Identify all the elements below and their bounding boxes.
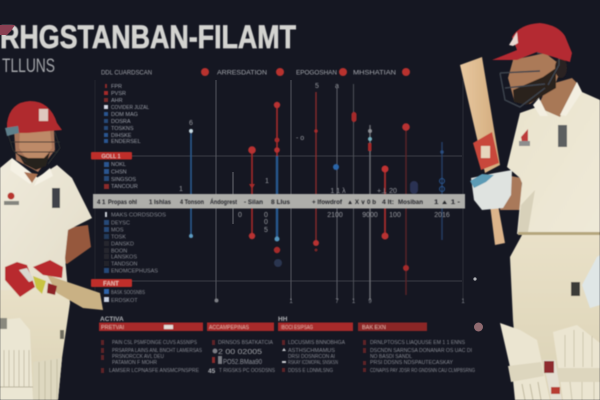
axis tick labels [214,298,465,305]
grey summary band: 1 ▲ 1 - [434,200,460,206]
chart series: stems and markers: 1 1 λ [330,188,346,195]
chart series: stems and markers [179,83,444,300]
right trousers [510,235,600,400]
right helmet [492,23,572,62]
left bat [47,275,103,310]
right shirt [507,82,600,234]
list: lower legend rows [104,212,166,274]
panel: fourth column: NO BASDI SANDL [370,354,412,360]
panel: second column: 2 00 02005 [218,347,262,356]
list: lower legend rows: LANSKOS [111,254,137,260]
decorative dots at right edge of chart [473,277,483,332]
list: upper legend rows: FPR [111,84,122,90]
bottom panels [99,316,475,375]
panel: Activa: PATAMON F MOHR [112,360,157,366]
value labels below band: 2100 [327,212,343,219]
value labels below band: 0 [264,219,268,226]
list: lower legend rows: ENOMCEPHUSAS [111,268,158,274]
list: lower legend rows: DEYSC [111,220,130,226]
list: upper legend rows: COVIDER JUZAL [111,105,149,111]
left pads [0,318,64,400]
list: final legend rows: ERDSKOT [111,298,138,304]
panel: second column: PO52.BMaa90 [223,359,262,366]
list: lower legend rows: BOON [111,248,127,254]
right bat [460,57,505,245]
list: lower legend rows: TANDSON [111,262,138,268]
chart legend: MHSHATIAN [353,70,396,76]
panel: Activa: ACTIVA [100,316,124,323]
list: lower legend rows: DANSKD [111,242,134,248]
list: final legend rows [104,289,145,304]
panel: fourth column: DRNLPTOSCS LIAQUUSE EM 1 1 ENNS [370,340,465,346]
panel: second column: T RIGSKS PC OOSDSNS [219,368,275,374]
panel: fourth column: BAK EXN [362,325,386,331]
right shirt badges [519,125,567,147]
chart series: stems and markers: 5 [315,83,319,90]
panel: fourth column: PRSI DDSNS NDSPAUTECASKAY [370,360,453,366]
axis tick labels: 1 [461,299,465,305]
list: upper legend rows: PVSR [111,91,126,97]
grey summary band: + Ifowdrof [312,200,343,206]
right neck and face [537,78,578,118]
category bar: FANT: FANT [103,282,119,288]
list: middle legend rows: TANCOUR [111,184,138,190]
left arm [60,225,91,264]
player: left batsman [0,101,103,400]
right second glove [582,255,600,308]
axis tick labels: 7 [335,299,339,305]
list: upper legend rows [104,84,149,145]
panel: third column: DDSS E LDNMLSNG [288,368,333,374]
list: upper legend rows: AHR [111,98,123,104]
list: upper legend rows: DIHSKE [111,133,132,139]
panel: third column: RSKAY ICDMOPAL SNSKSN [288,360,338,366]
right waistband [518,232,600,235]
list: upper legend rows: TOSKNS [111,126,134,132]
panel: Activa: PRETVAI [101,325,125,331]
panel: third column [278,316,353,374]
grey summary band [93,194,465,208]
value labels below band [238,212,450,234]
axis tick labels: 1 [289,299,293,305]
value labels below band: 100 [389,212,401,219]
icon: title flag mark [0,25,15,35]
list: middle legend rows: CHSN [111,170,127,176]
panel: fourth column: CDNAPIS PAY JDSR RO GNDSNN CAU CLMPBSRNG [370,368,475,374]
grey summary band: 4 lt: [382,200,394,206]
panel: Activa: PRSARPA LAINS ANL BNCHT LAMERSAS [112,348,202,354]
list: lower legend rows: MAKS CORDSDSOS [111,212,166,218]
value labels below band: 0 [238,212,242,219]
panel: Activa [99,316,203,374]
panel: Activa: PAIN CSL PSMFDINGE CUVS ASSNIPS [112,340,197,346]
chart legend: ARRESDATION [217,70,267,76]
chart series: stems and markers: a [335,83,339,90]
panel: third column: HH [278,316,288,323]
panel: third column: IBOCI ESIPSAG [281,325,313,331]
panel: second column: DRNSOS BSATKATCIA [218,340,273,346]
list: upper legend rows: DOSRA [111,119,131,125]
left shirt badges [4,188,60,208]
list: lower legend rows: TOSK [111,234,126,240]
chart series: stems and markers: +⊥ 20 [377,188,397,195]
grey summary band: 1 Ishlas [149,200,172,206]
chart legend: EPOGOSHAN [296,70,337,76]
list: lower legend rows: MOS [111,228,124,234]
chart series: stems and markers: 1 [265,178,269,185]
list: final legend rows: BASK SOOSNBS [111,290,145,296]
panel: third column: LDCUSMIS BNNOBHGA [288,340,345,346]
panel: fourth column [358,322,475,374]
list: upper legend rows: ENDERSEL [111,139,141,145]
chart grid lines [95,80,463,300]
grey summary band: Mosiban [398,200,423,206]
axis tick labels: 1 [352,299,356,305]
panel: second column: 45 [208,368,216,375]
category bar: FANT [91,279,132,288]
panel: third column: DRSI DOSNRCON AI [288,354,335,360]
subtitle: TLLUNS [2,56,55,77]
panel: Activa: LAMSER LCPNASFE ANSMCPNSPRE [109,368,199,374]
list: upper legend rows: DOM MAG [111,112,138,118]
value labels below band: 0 [264,212,268,219]
category bar: GOLL [91,152,132,160]
grey summary band: 8 Llus [271,200,291,206]
left neck and face [14,130,55,172]
title: RHGSTANBAN-FILAMT [0,19,296,55]
chart series: stems and markers: 1 [179,186,183,193]
left helmet grille [8,132,60,164]
chart legend [101,68,410,76]
right pads [500,323,600,400]
chart series: stems and markers: 6 [189,120,193,127]
chart panel [91,68,465,305]
left helmet [5,101,62,136]
panel: fourth column: DSCNDN SARNCSA DONANAR OS UAC DI [370,348,472,354]
panel: Activa: PRSNORCCK AVL DEU [112,354,164,360]
right glove [470,170,512,210]
value labels below band: 9000 [362,212,378,219]
grey summary band: Ándogrest [210,199,237,206]
category bar: GOLL: GOLL 1 [101,154,121,160]
value labels below band: 5 [264,227,268,234]
right arm [500,175,522,210]
grey summary band: 4 1 [97,200,106,206]
left shirt [0,158,92,290]
player: right batsman [460,23,600,400]
grey summary band: Propas ohl [108,200,137,206]
list: middle legend rows [104,162,138,190]
grey summary band: - Silan [244,200,263,206]
left trousers [0,285,70,400]
left gloves [5,260,63,297]
value labels below band: 2016 [434,212,450,219]
grey summary band: ▲ X ∨ 0 b [347,200,376,206]
chart series: stems and markers: - o [296,135,304,142]
panel: second column [207,322,275,375]
right helmet grille [500,53,559,107]
grey summary band: 4 Tonson [180,200,204,206]
list: middle legend rows: NOKL [111,162,126,168]
list: middle legend rows: SINGSOS [111,177,136,183]
chart legend: DDL CUARDSCAN [101,70,152,76]
panel: second column: ACCAMPEPINAS [209,325,249,331]
axis tick labels: 9 [368,299,372,305]
panel: third column: ASTHSCHMAMUS [288,348,335,354]
